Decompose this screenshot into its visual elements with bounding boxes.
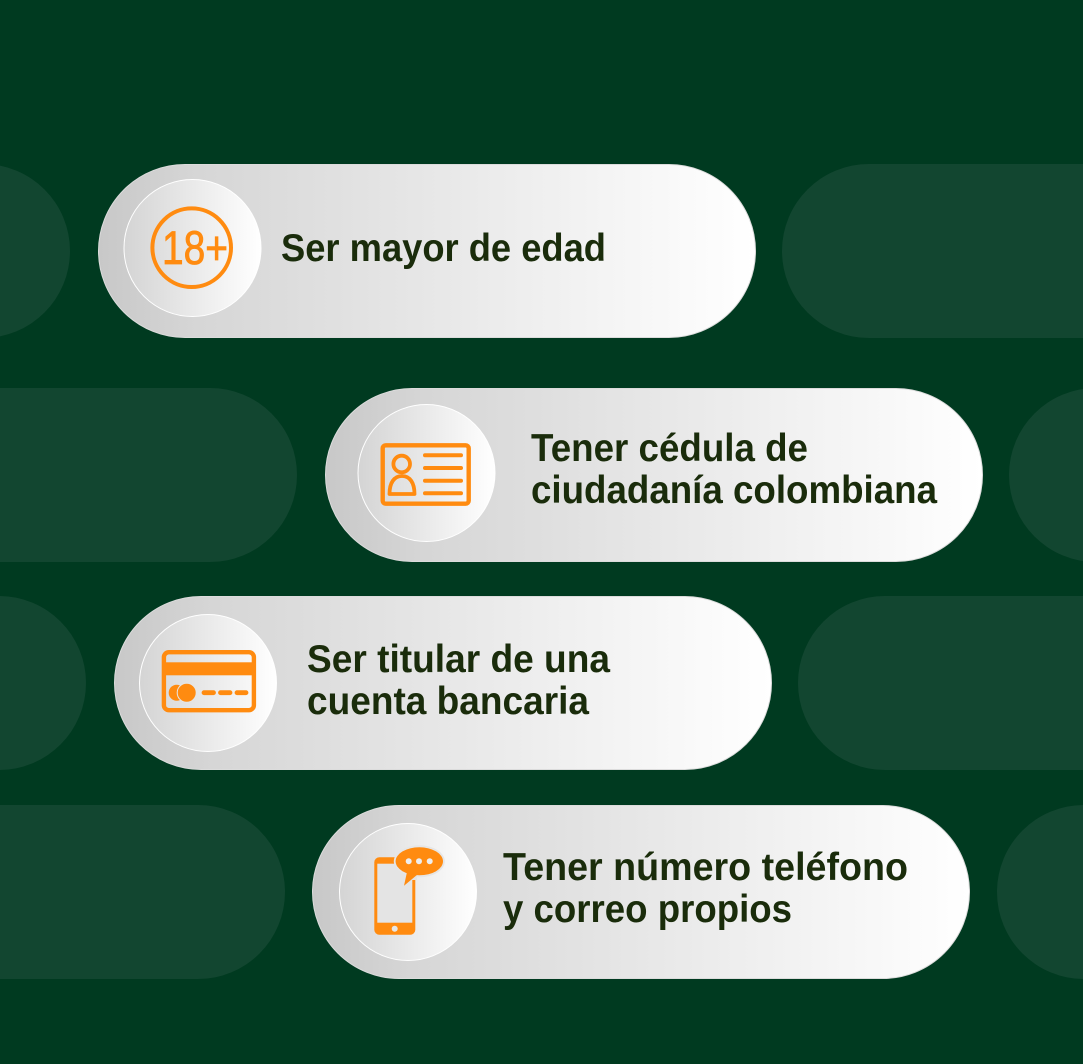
icon: 18+ [124, 180, 261, 316]
background decorative pills [0, 164, 1083, 979]
panel: ser mayor de edad [98, 164, 756, 338]
label: ser mayor de edad: Ser mayor de edad [281, 227, 606, 270]
label: numero telefono: Tener número teléfono [503, 846, 908, 889]
icon: credit card [140, 614, 276, 752]
icon: phone with speech bubble [340, 824, 476, 960]
label: ciudadania: ciudadanía colombiana [531, 469, 938, 512]
icon: 18+: 18+ [162, 221, 228, 274]
label: cedula: Tener cédula de [531, 427, 808, 470]
panel: cedula [326, 388, 982, 562]
icon: id card [358, 404, 495, 542]
label: titular: Ser titular de una [307, 638, 611, 681]
panel: cuenta bancaria [114, 596, 772, 770]
panel: telefono y correo [312, 806, 970, 978]
label: cuenta bancaria: cuenta bancaria [307, 680, 590, 723]
label: correo: y correo propios [503, 888, 792, 931]
